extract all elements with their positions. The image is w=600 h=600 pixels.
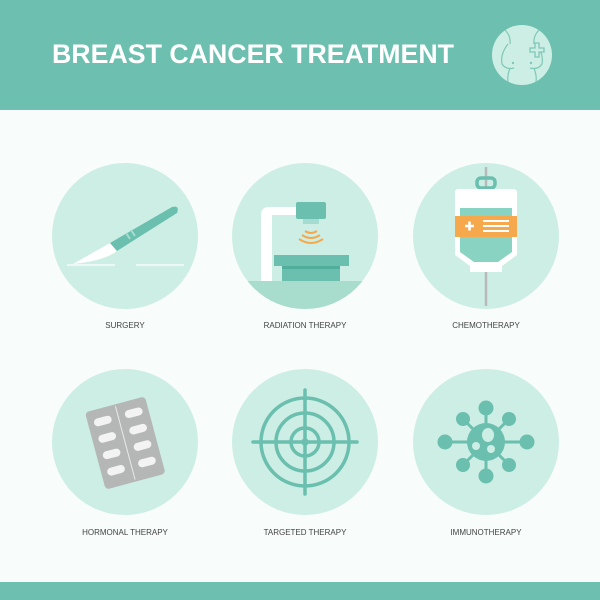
label: surgery: SURGERY bbox=[105, 321, 145, 330]
icon: target bbox=[253, 390, 357, 494]
panel: radiation therapy bbox=[230, 163, 380, 330]
footer band bbox=[0, 582, 600, 600]
label: immunotherapy: IMMUNOTHERAPY bbox=[450, 528, 522, 537]
header band bbox=[0, 0, 600, 110]
panel: surgery bbox=[52, 163, 198, 330]
panel: hormonal therapy bbox=[52, 369, 198, 537]
icon: IV bag bbox=[455, 167, 517, 306]
icon: breast badge bbox=[492, 25, 552, 85]
label: chemotherapy: CHEMOTHERAPY bbox=[452, 321, 520, 330]
title: BREAST CANCER TREATMENT bbox=[52, 39, 454, 69]
icon: radiation machine bbox=[261, 202, 349, 281]
panel: chemotherapy bbox=[413, 163, 559, 330]
panel: targeted therapy bbox=[232, 369, 378, 537]
label: targeted therapy: TARGETED THERAPY bbox=[264, 528, 347, 537]
icon: scalpel bbox=[67, 207, 184, 265]
icon: pill blister bbox=[85, 396, 166, 490]
label: radiation therapy: RADIATION THERAPY bbox=[264, 321, 347, 330]
label: hormonal therapy: HORMONAL THERAPY bbox=[82, 528, 169, 537]
panel: immunotherapy bbox=[413, 369, 559, 537]
icon: virus cell bbox=[438, 400, 534, 484]
